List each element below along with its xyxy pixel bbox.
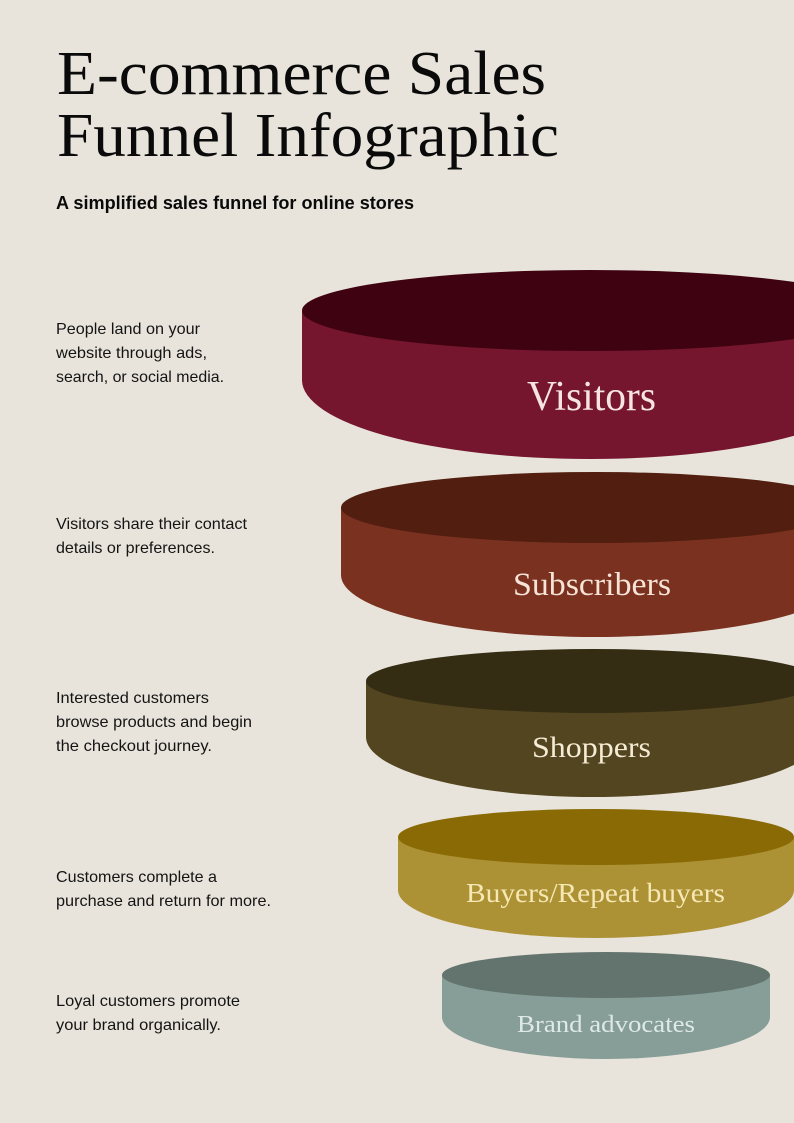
funnel tier: Visitors [302,270,794,459]
text block: subscribers description [56,516,248,557]
funnel tier: Subscribers [341,472,794,637]
text block: visitors description: website through ads, [55,345,207,362]
text block: shoppers description: the checkout journey. [56,738,212,755]
title: E-commerce Sales [57,40,546,108]
text block: visitors description [55,321,224,386]
text block: advocates description: your brand organically. [56,1017,221,1034]
text block: shoppers description: browse products and begin [56,714,252,731]
funnel tier: Buyers/Repeat buyers [398,809,794,938]
funnel tier: Shoppers [366,649,794,797]
text block: buyers description: Customers complete a [56,869,217,886]
funnel tier: Buyers/Repeat buyers: Buyers/Repeat buyers [466,878,725,908]
text block: subscribers description: details or preferences. [56,540,215,557]
funnel tier: Brand advocates [442,952,770,1059]
title [57,40,559,170]
text block: buyers description [56,869,271,910]
text block: buyers description: purchase and return for more. [56,893,271,910]
funnel tier: Shoppers: Shoppers [532,731,651,764]
text block: shoppers description [56,690,252,755]
text block: advocates description: Loyal customers promote [56,993,240,1010]
subtitle: A simplified sales funnel for online stores [56,193,414,213]
text block: shoppers description: Interested customers [56,690,209,707]
text block: subscribers description: Visitors share their contact [56,516,248,533]
text block: advocates description [56,993,240,1034]
text block: visitors description: People land on your [56,321,201,338]
title: Funnel Infographic [57,102,559,170]
text block: visitors description: search, or social media. [56,369,224,386]
funnel tier: Visitors: Visitors [527,374,656,420]
funnel tier: Brand advocates: Brand advocates [517,1012,695,1038]
funnel tier: Subscribers: Subscribers [513,567,671,603]
